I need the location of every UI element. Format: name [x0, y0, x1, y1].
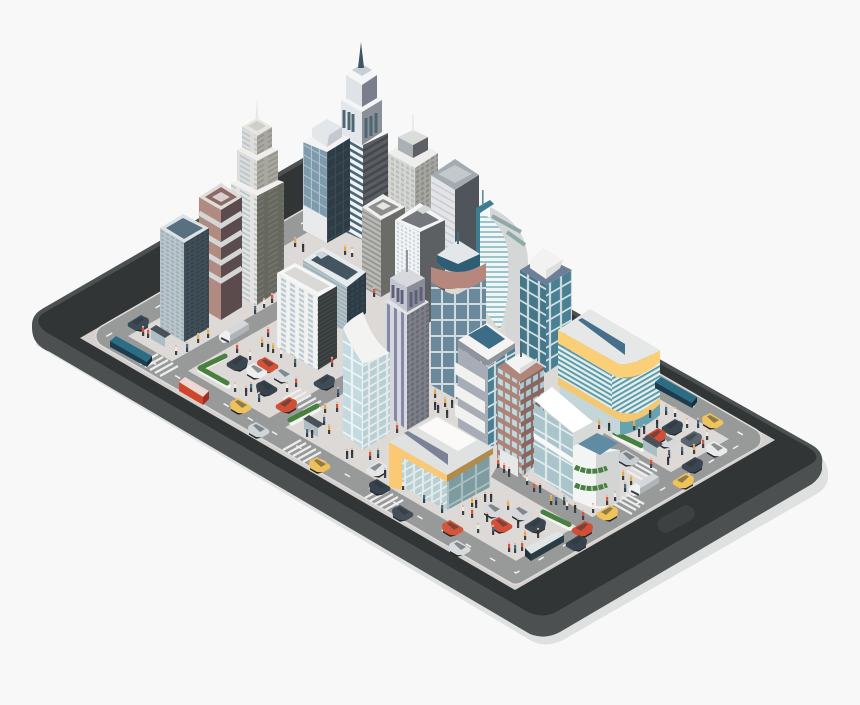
- tower: grey art deco: [385, 250, 429, 430]
- building: yellow curved office: [558, 309, 660, 435]
- crosswalks: [140, 354, 657, 514]
- tower: tall beige stepped skyscraper: [231, 98, 284, 305]
- tower: dark glass with white roof: [303, 119, 350, 243]
- building: white office: [277, 263, 337, 370]
- tablet screen face: [38, 163, 816, 616]
- cross streets: [175, 302, 672, 525]
- perimeter curb: [107, 202, 750, 573]
- tower: grey office behind: [388, 115, 438, 245]
- road vehicles: [110, 315, 727, 561]
- perimeter road: [107, 202, 750, 573]
- delivery trucks: [219, 320, 249, 343]
- dark city bus: [525, 531, 564, 561]
- tower: white office grey roof: [395, 203, 445, 330]
- tablet body side: [32, 158, 822, 637]
- tower: striped grey mid: [362, 194, 405, 297]
- building: dark teal wide block: [303, 247, 366, 330]
- green planters: [200, 356, 642, 528]
- fire truck: [179, 377, 209, 405]
- building: curved glass with white roof: [343, 312, 390, 450]
- tower: spire skyscraper: [341, 42, 388, 240]
- city ground map: [80, 189, 775, 590]
- building: white curved with solar roof: [534, 387, 620, 508]
- bus stops: [150, 325, 171, 347]
- building: white balcony with solar roof: [455, 323, 515, 447]
- pedestrians: [142, 237, 708, 553]
- building: low yellow front: [389, 415, 493, 510]
- blue buses: [110, 336, 152, 367]
- ground plate: [80, 189, 775, 590]
- tower: blue-grey far left: [160, 214, 209, 342]
- road lane dashes: [107, 202, 750, 573]
- tower: brown curved glass: [431, 232, 486, 400]
- tablet home button: [655, 503, 697, 535]
- tower: teal glass with white cap: [520, 248, 572, 373]
- tower: blue-grey roof block: [431, 159, 479, 285]
- cars: [128, 315, 727, 557]
- tower: curved white teal shell: [476, 190, 528, 353]
- tower: brown brick: [497, 343, 544, 477]
- tablet: [32, 158, 828, 644]
- tower: brown striped: [199, 183, 242, 320]
- tablet drop shadow: [36, 330, 828, 644]
